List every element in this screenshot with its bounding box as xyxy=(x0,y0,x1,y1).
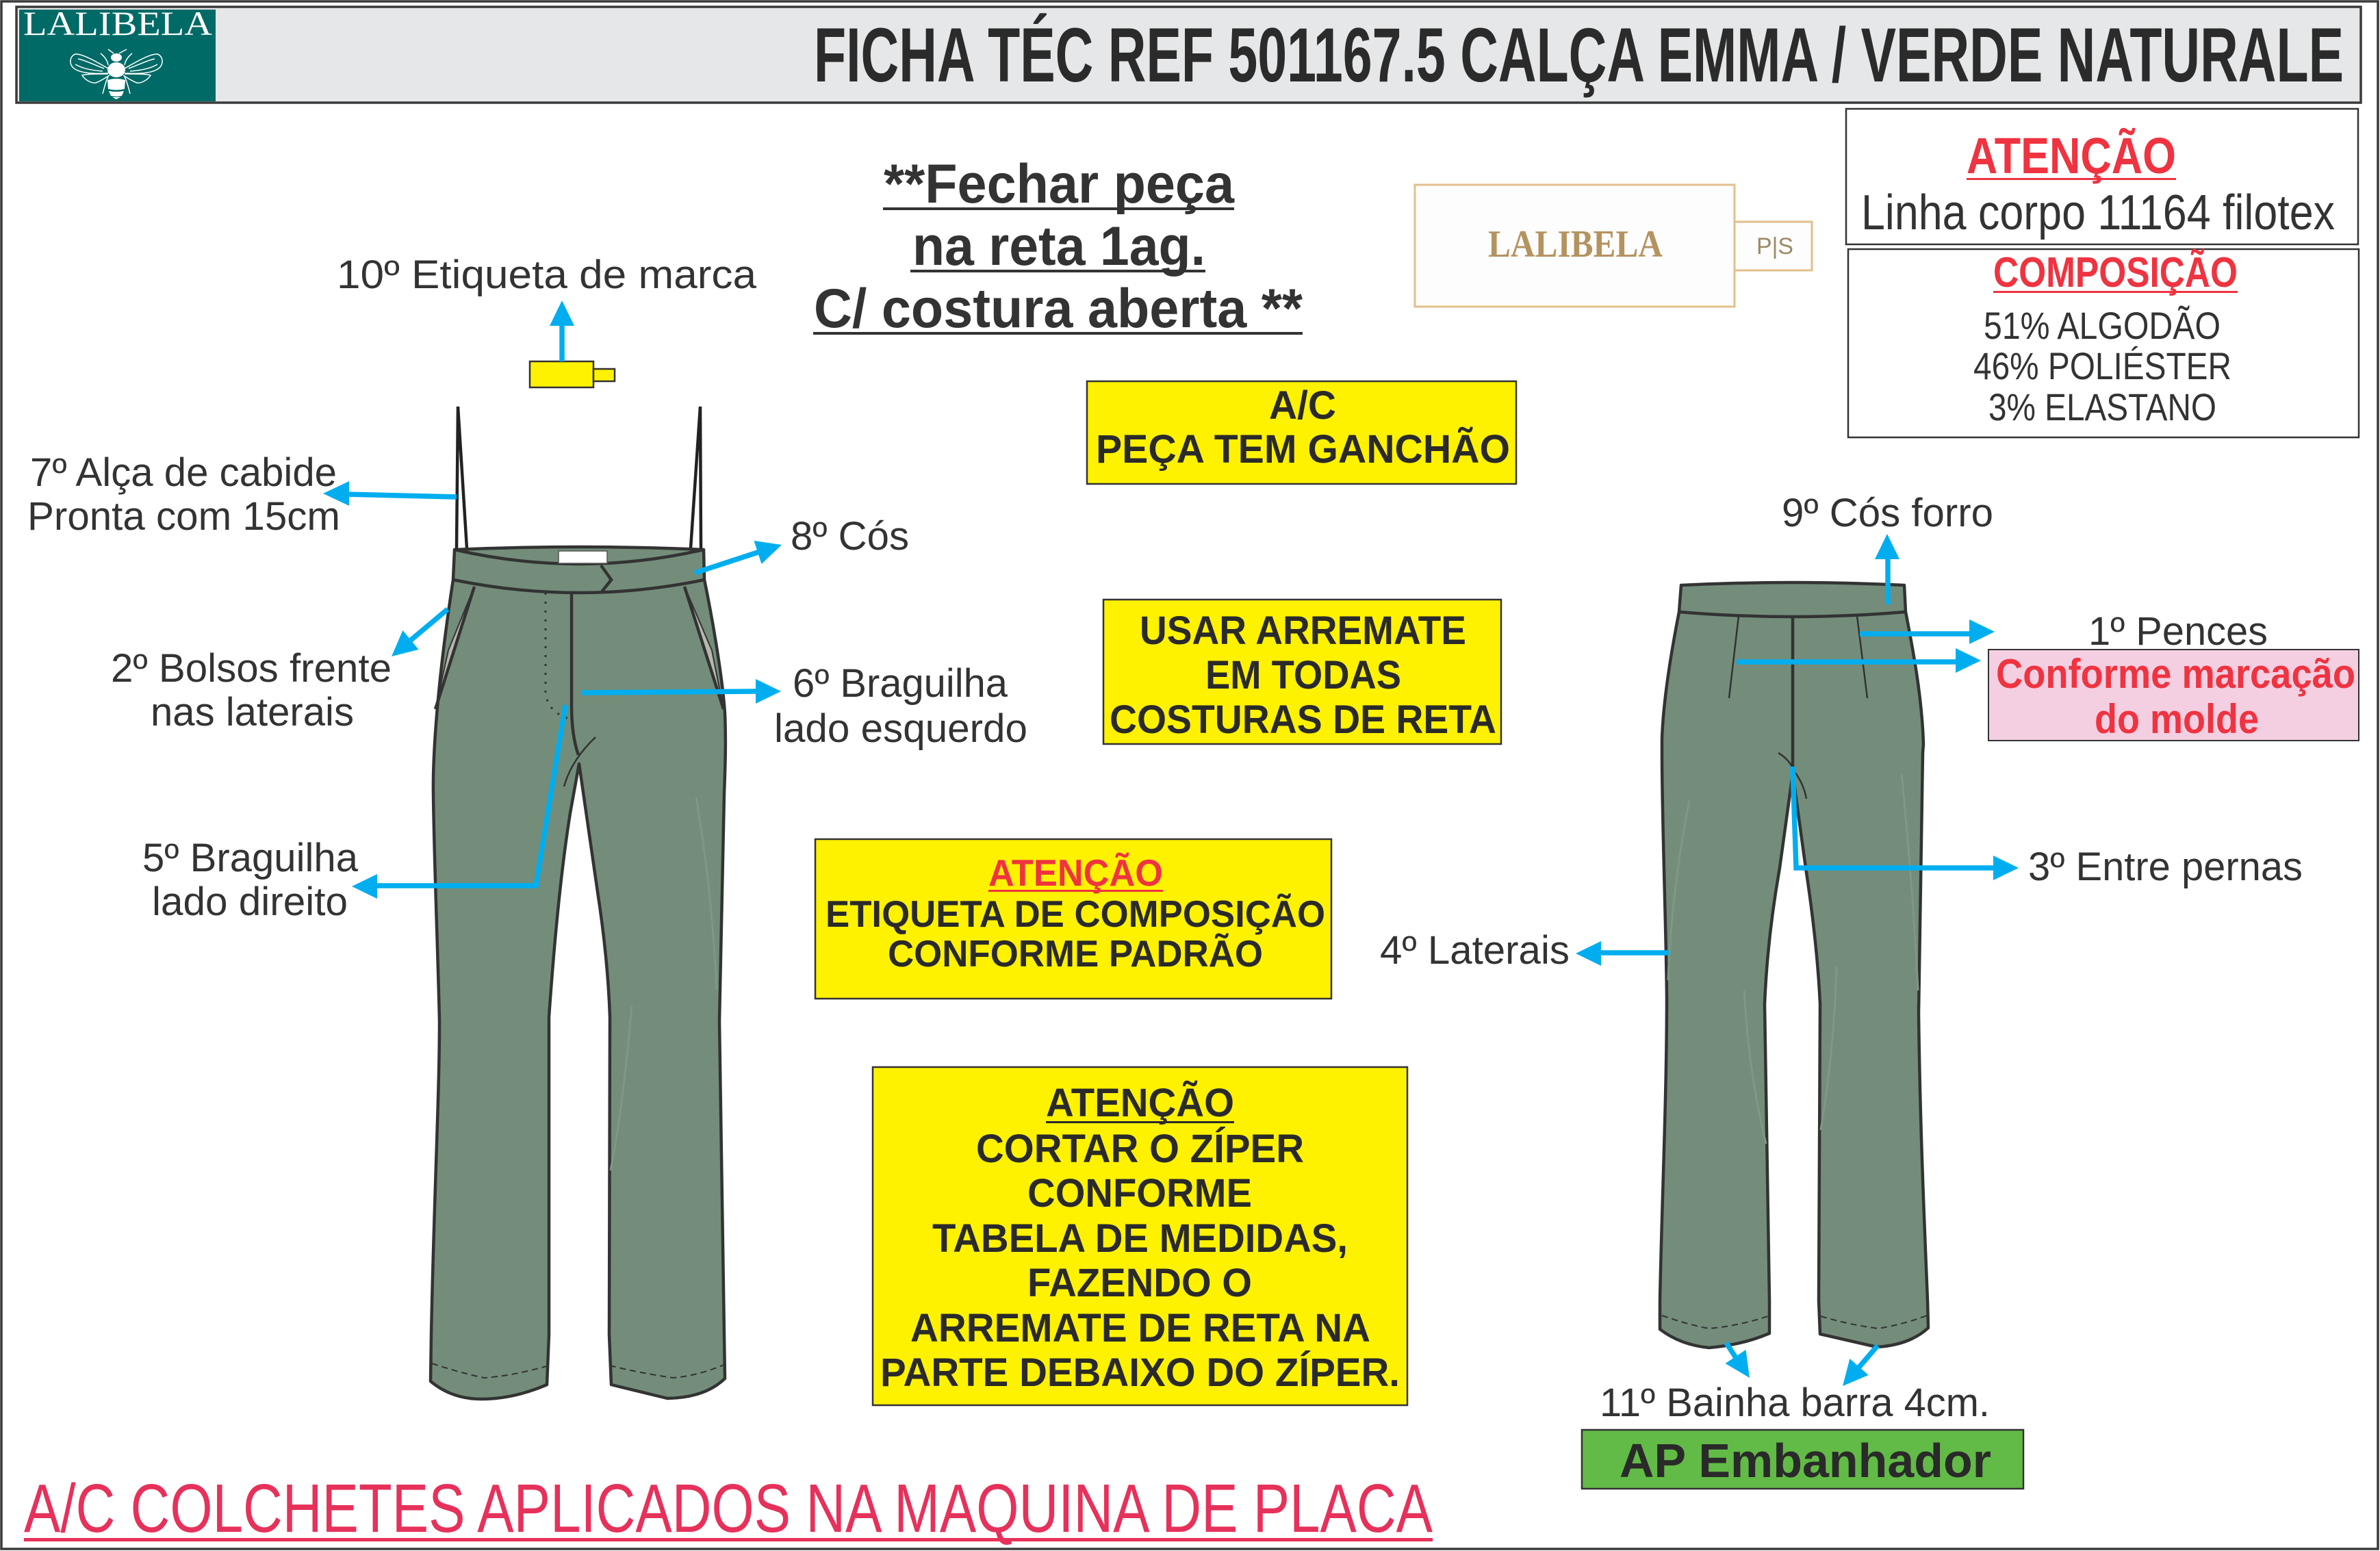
label: fly right: lado direito xyxy=(152,880,348,924)
panel: composition: 46% POLIÉSTER xyxy=(1973,344,2231,387)
arrow: brand label xyxy=(550,300,574,361)
panel: composition xyxy=(1848,249,2359,437)
callout: zipper: PARTE DEBAIXO DO ZÍPER. xyxy=(880,1350,1400,1395)
closing instruction heading: na reta 1ag. xyxy=(912,216,1205,277)
label: fly left: lado esquerdo xyxy=(774,706,1027,751)
label: waistband lining: 9º Cós forro xyxy=(1782,491,1993,535)
label: side seams: 4º Laterais xyxy=(1380,928,1570,973)
arrow: waistband lining xyxy=(1875,534,1899,604)
panel: composition: 3% ELASTANO xyxy=(1988,385,2216,428)
label: hanger loop: Pronta com 15cm xyxy=(27,494,340,539)
callout: composition label: CONFORME PADRÃO xyxy=(888,932,1263,975)
pants: front view xyxy=(431,407,726,1399)
callout: zipper: ATENÇÃO xyxy=(1046,1081,1234,1125)
callout: pattern marking xyxy=(1988,650,2359,742)
closing instruction heading: C/ costura aberta ** xyxy=(814,278,1303,339)
arrow: fly left xyxy=(582,679,781,704)
header bar xyxy=(16,4,2361,103)
label: hanger loop xyxy=(27,450,340,539)
brand label tag: P|S xyxy=(1756,233,1793,259)
arrow: hem right xyxy=(1843,1346,1878,1386)
label: front pockets: nas laterais xyxy=(151,690,354,734)
icon: yellow label tag xyxy=(530,361,615,387)
hem stitching xyxy=(432,1363,726,1378)
callout: hemmer: AP Embanhador xyxy=(1620,1434,1991,1487)
panel: composition: COMPOSIÇÃO xyxy=(1993,249,2238,296)
hem stitching xyxy=(1662,1316,1927,1329)
panel: thread attention xyxy=(1846,109,2358,244)
arrow: darts upper xyxy=(1860,619,1995,644)
callout: composition label xyxy=(815,839,1331,999)
callout: backstitch: USAR ARREMATE xyxy=(1140,608,1466,653)
label: hanger loop: 7º Alça de cabide xyxy=(30,450,337,495)
logo: Lalibela bee: LALIBELA xyxy=(23,4,212,42)
closing instruction heading xyxy=(813,153,1303,339)
brand label tag: LALIBELA xyxy=(1488,223,1663,266)
callout: backstitch: COSTURAS DE RETA xyxy=(1110,697,1496,742)
arrow: hem left xyxy=(1725,1343,1750,1378)
hanger straps xyxy=(457,407,701,548)
callout: zipper: CORTAR O ZÍPER xyxy=(976,1127,1304,1171)
label: front pockets xyxy=(111,646,392,734)
callout: zipper: ARREMATE DE RETA NA xyxy=(910,1306,1370,1350)
logo: Lalibela bee xyxy=(19,4,216,101)
callout: hook: A/C xyxy=(1269,383,1336,428)
arrow: inseam xyxy=(1793,767,2019,880)
callout: zipper: TABELA DE MEDIDAS, xyxy=(932,1216,1348,1261)
callout: backstitch: EM TODAS xyxy=(1205,653,1401,697)
callout: backstitch xyxy=(1103,600,1501,744)
closing instruction heading: **Fechar peça xyxy=(884,153,1235,215)
label: darts: 1º Pences xyxy=(2088,609,2268,654)
label: brand tag: 10º Etiqueta de marca xyxy=(337,253,757,297)
callout: zipper: FAZENDO O xyxy=(1027,1261,1252,1305)
callout: hook: PEÇA TEM GANCHÃO xyxy=(1096,427,1510,472)
arrow: front pockets xyxy=(392,609,448,656)
label: hem: 11º Bainha barra 4cm. xyxy=(1600,1381,1990,1425)
arrow: side seams xyxy=(1576,941,1669,966)
label: fly right xyxy=(142,836,359,924)
footer warning: A/C COLCHETES APLICADOS NA MAQUINA DE PLACA xyxy=(24,1470,1433,1547)
label: waistband: 8º Cós xyxy=(791,514,909,559)
label: fly right: 5º Braguilha xyxy=(142,836,359,880)
brand label tag xyxy=(1415,185,1812,307)
arrow: waistband xyxy=(695,541,782,573)
arrow: fly right xyxy=(352,705,565,899)
callout: zipper: CONFORME xyxy=(1027,1171,1252,1216)
arrow: hanger loop xyxy=(323,481,457,506)
label: fly left xyxy=(774,661,1027,751)
label: front pockets: 2º Bolsos frente xyxy=(111,646,392,691)
callout: composition label: ETIQUETA DE COMPOSIÇÃO xyxy=(826,893,1325,935)
callout: composition label: ATENÇÃO xyxy=(988,851,1163,894)
callout: zipper xyxy=(873,1067,1407,1405)
label: fly left: 6º Braguilha xyxy=(793,661,1008,706)
panel: thread attention: ATENÇÃO xyxy=(1967,127,2176,184)
pants: back view xyxy=(1660,582,1928,1348)
label: inseam: 3º Entre pernas xyxy=(2028,845,2303,889)
callout: pattern marking: do molde xyxy=(2095,696,2259,742)
panel: composition: 51% ALGODÃO xyxy=(1984,304,2221,347)
callout: hook xyxy=(1087,381,1516,484)
arrow: darts lower xyxy=(1737,648,1981,673)
